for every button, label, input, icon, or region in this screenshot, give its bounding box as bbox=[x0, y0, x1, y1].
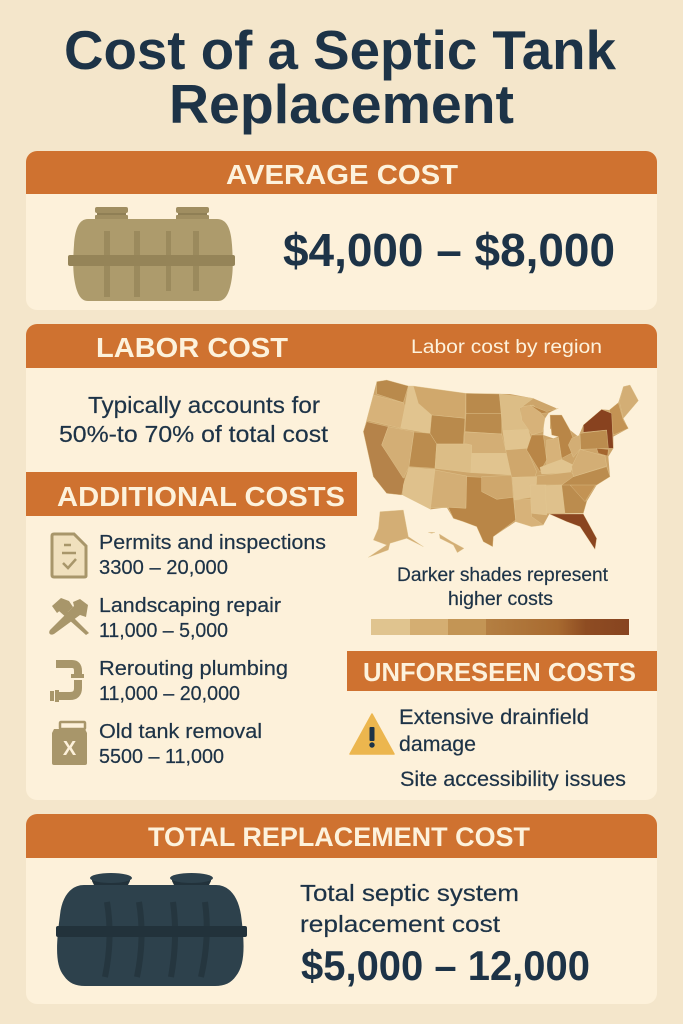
icon: dark septic tank bbox=[56, 873, 247, 986]
item: permits: Permits and inspections bbox=[99, 532, 326, 554]
item: plumbing bbox=[52, 658, 288, 705]
total cost text: Total septic system bbox=[300, 880, 519, 906]
panel: total replacement cost bbox=[26, 814, 657, 1004]
total cost text: replacement cost bbox=[300, 911, 501, 937]
heading: total replacement cost bbox=[26, 814, 657, 858]
legend: cost gradient bar bbox=[371, 619, 629, 635]
icon: tan septic tank bbox=[68, 207, 235, 301]
map caption bbox=[397, 565, 609, 610]
icon: pipe bbox=[52, 664, 84, 702]
unforeseen cost list: Site accessibility issues bbox=[400, 768, 626, 791]
item: landscaping: Landscaping repair bbox=[99, 595, 281, 617]
average cost value: $4,000 – $8,000 bbox=[283, 224, 615, 276]
title: Cost of a Septic Tank bbox=[64, 19, 616, 81]
item: tank removal: Old tank removal bbox=[99, 721, 262, 743]
title bbox=[64, 19, 616, 135]
chart: US labor cost map bbox=[363, 380, 638, 557]
icon: old tank with X: X bbox=[63, 738, 77, 760]
heading: additional costs bbox=[26, 472, 357, 516]
map caption: Darker shades represent bbox=[397, 565, 609, 586]
heading: labor cost: LABOR COST bbox=[96, 332, 288, 363]
labor cost share text: Typically accounts for bbox=[88, 392, 320, 418]
heading: average cost bbox=[26, 151, 657, 194]
map caption: higher costs bbox=[448, 589, 553, 610]
item: permits: 3300 – 20,000 bbox=[99, 557, 228, 579]
icon: warning triangle bbox=[350, 714, 394, 754]
icon: permit document bbox=[52, 534, 86, 577]
item: plumbing: 11,000 – 20,000 bbox=[99, 683, 240, 705]
unforeseen cost list: damage bbox=[399, 733, 476, 756]
item: permits bbox=[52, 532, 326, 579]
labor cost share text bbox=[59, 392, 329, 447]
heading: additional costs: ADDITIONAL COSTS bbox=[57, 481, 345, 512]
heading: unforeseen costs: UNFORESEEN COSTS bbox=[363, 657, 636, 687]
item: landscaping: 11,000 – 5,000 bbox=[99, 620, 228, 642]
panel: average cost bbox=[26, 151, 657, 310]
heading: labor cost: Labor cost by region bbox=[411, 337, 602, 358]
total cost value: $5,000 – 12,000 bbox=[301, 942, 590, 989]
icon: crossed tools bbox=[49, 598, 89, 635]
labor cost share text: 50%-to 70% of total cost bbox=[59, 421, 329, 447]
heading: total replacement cost: TOTAL REPLACEMENT COST bbox=[148, 822, 530, 852]
item: plumbing: Rerouting plumbing bbox=[99, 658, 288, 680]
item: landscaping bbox=[49, 595, 281, 642]
panel: labor and additional costs bbox=[26, 324, 657, 800]
icon: old tank with X bbox=[52, 722, 87, 765]
heading: average cost: AVERAGE COST bbox=[226, 159, 458, 190]
item: tank removal: 5500 – 11,000 bbox=[99, 746, 224, 768]
heading: unforeseen costs bbox=[347, 651, 657, 691]
title: Replacement bbox=[169, 73, 514, 135]
unforeseen cost list bbox=[399, 706, 626, 791]
unforeseen cost list: Extensive drainfield bbox=[399, 706, 589, 729]
heading: labor cost bbox=[26, 324, 657, 368]
total cost text bbox=[300, 880, 590, 989]
item: tank removal bbox=[52, 721, 262, 768]
